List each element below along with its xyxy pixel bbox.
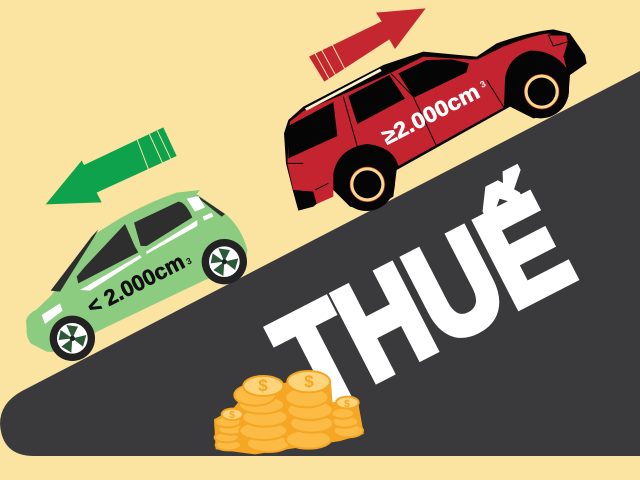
- car body: [26, 190, 247, 353]
- SUV label: ≥2.000cm: [378, 79, 484, 149]
- SUV silhouette: [284, 29, 587, 211]
- pile base: [215, 383, 363, 453]
- SUV rear wheel: [338, 154, 395, 211]
- right stack: [331, 397, 363, 437]
- car highlights: [42, 196, 213, 324]
- green car: [26, 190, 247, 361]
- dollar signs: $: [258, 376, 268, 395]
- red SUV: [284, 29, 587, 211]
- SUV windows: [288, 59, 469, 158]
- car label: < 2.000cm: [83, 249, 189, 319]
- dollar signs: $: [229, 410, 235, 421]
- small left stack: [215, 409, 245, 450]
- SUV door lines: [287, 72, 504, 190]
- dollar signs: $: [304, 372, 314, 391]
- red arrow: [309, 8, 426, 82]
- SUV body: [287, 33, 568, 204]
- car front wheel: [202, 239, 247, 284]
- dollar signs: $: [344, 399, 350, 410]
- center stack: [234, 376, 290, 452]
- tall stack: [285, 371, 333, 449]
- coins pile: [215, 371, 363, 453]
- car label superscript: 3: [184, 256, 193, 267]
- car windows: [51, 195, 225, 292]
- green arrow: [46, 127, 177, 204]
- car rear wheel: [50, 316, 95, 361]
- dollar signs: [229, 372, 350, 421]
- SUV headlight: [548, 35, 568, 46]
- SUV front wheel: [512, 62, 569, 118]
- SUV label superscript: 3: [478, 79, 487, 90]
- SUV roof rack: [305, 69, 382, 111]
